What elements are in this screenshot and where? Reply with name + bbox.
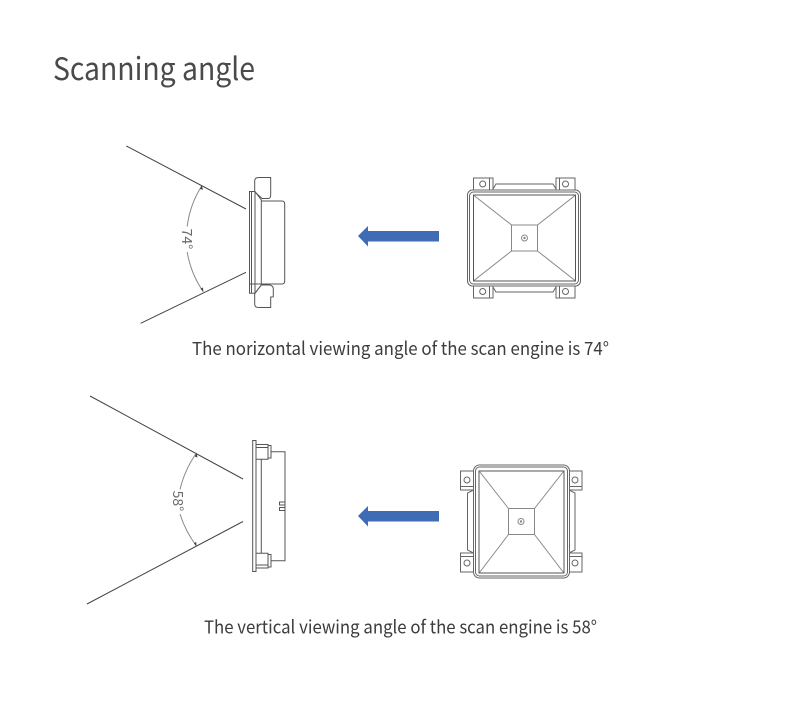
- angle boundary lines: [126, 146, 246, 323]
- angle arc: [187, 186, 203, 292]
- mounting tabs: [474, 178, 575, 298]
- angle arrowheads: [194, 452, 198, 546]
- housing: [468, 190, 580, 286]
- angle label: 58°: [168, 491, 188, 511]
- inner window: [480, 472, 564, 572]
- inner window: [474, 196, 575, 280]
- side view device: [250, 178, 285, 308]
- caption: vertical: The vertical viewing angle of the scan engine is 58°: [204, 614, 597, 640]
- title: Scanning angle: [53, 44, 255, 89]
- angle arc: [180, 453, 196, 546]
- diagram: horizontal viewing angle: [126, 146, 285, 323]
- diagram: vertical viewing angle: [87, 396, 285, 604]
- caption: horizontal: The norizontal viewing angle of the scan engine is 74°: [192, 335, 609, 361]
- angle boundary lines: [87, 396, 243, 604]
- arrow: top: [358, 226, 439, 246]
- housing: [474, 465, 570, 578]
- arrow: bottom: [358, 506, 439, 526]
- side view device: [253, 440, 285, 572]
- mounting tabs: [460, 471, 582, 572]
- angle label: 74°: [177, 229, 197, 249]
- angle arrowheads: [200, 185, 203, 292]
- front view device: top: [468, 178, 580, 298]
- front view device: bottom: [460, 465, 582, 578]
